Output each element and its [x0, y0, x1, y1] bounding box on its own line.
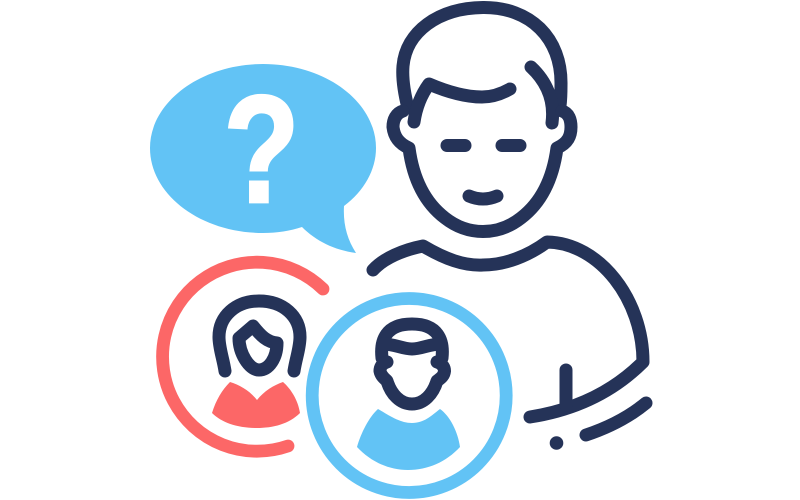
small man fringe — [383, 344, 441, 349]
male profile — [312, 298, 506, 492]
small man torso — [357, 409, 460, 470]
shoulders and arm — [373, 242, 643, 417]
blue ring — [312, 298, 506, 492]
female profile — [163, 262, 323, 451]
woman torso — [212, 382, 300, 428]
fringe — [414, 84, 510, 122]
small man face — [380, 362, 444, 404]
large man body — [373, 242, 646, 450]
left eye — [447, 139, 465, 152]
right hair lock — [531, 67, 553, 123]
face and ears outline — [393, 111, 571, 232]
right eye — [502, 139, 520, 152]
large man head — [393, 7, 571, 232]
bubble shape — [150, 64, 376, 253]
dot — [550, 436, 563, 450]
question mark: ? — [223, 64, 300, 235]
speech bubble with question mark — [150, 64, 376, 253]
lower curved stroke — [586, 403, 646, 435]
arm crease — [560, 370, 572, 405]
mouth — [469, 196, 497, 199]
hair outline — [403, 7, 561, 108]
small man hair — [382, 324, 442, 358]
woman hair — [219, 301, 300, 371]
woman face — [239, 326, 277, 370]
red ring — [163, 262, 323, 451]
